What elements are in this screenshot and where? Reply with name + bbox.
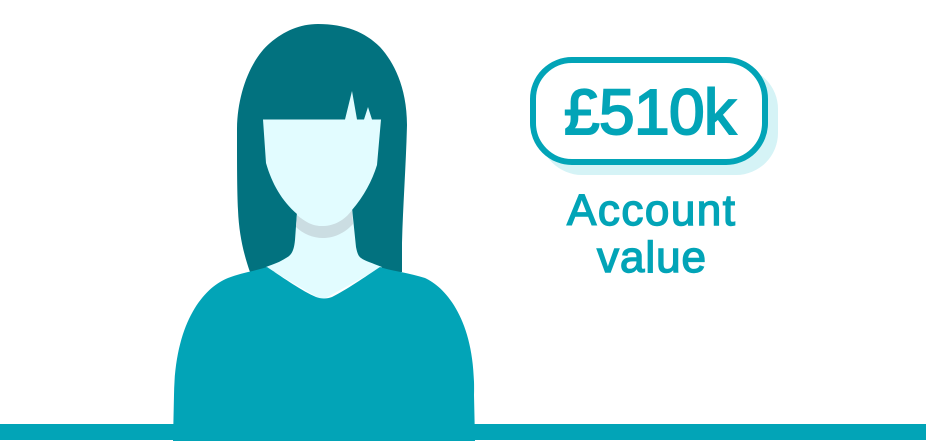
- neck: [266, 208, 382, 300]
- ground bar: [0, 424, 926, 440]
- badge outline: [533, 60, 765, 162]
- badge value: £510k: [564, 76, 737, 148]
- label: account value: Account: [567, 186, 735, 235]
- illustration: woman portrait: [173, 24, 475, 441]
- hair: [237, 24, 407, 272]
- neck shadow: [296, 210, 353, 238]
- label: account value: [567, 186, 735, 282]
- badge shadow: [540, 67, 778, 175]
- shirt: [173, 267, 475, 441]
- label: account value: value: [597, 233, 706, 282]
- face with fringe gaps: [263, 91, 381, 226]
- value badge: [533, 60, 778, 175]
